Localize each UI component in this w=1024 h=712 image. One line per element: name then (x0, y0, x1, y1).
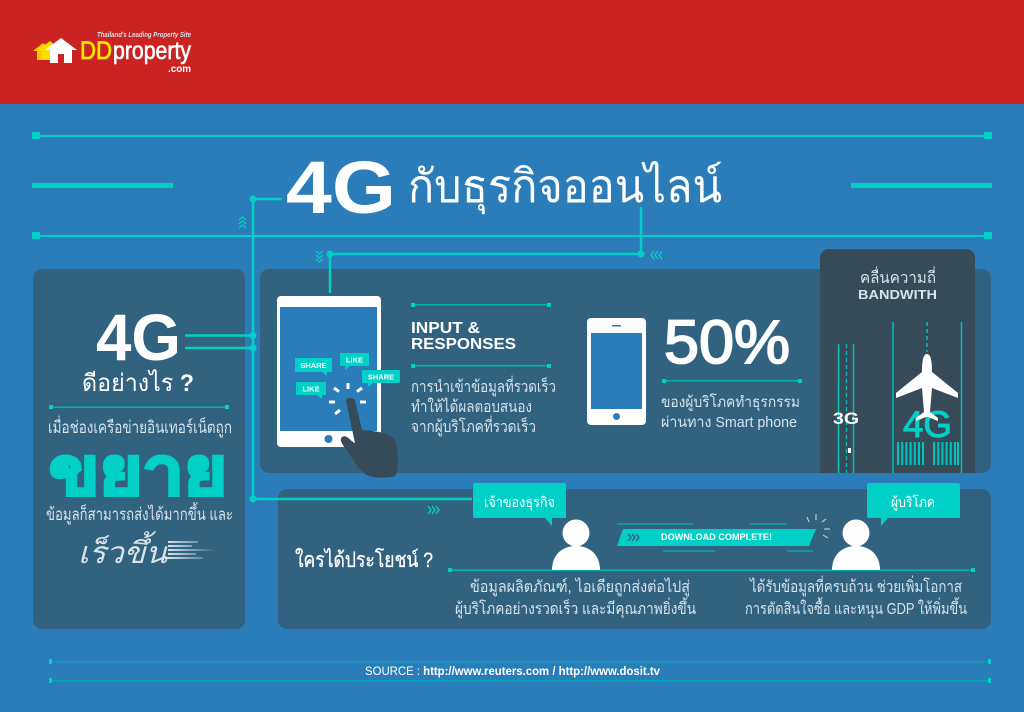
panel: input and smartphone (260, 269, 991, 473)
text: consumer benefit: การตัดสินใจซื้อ และหนุน GDP ให้พิ่มขึ้น (745, 597, 967, 619)
divider: bottom panel (448, 568, 975, 572)
title: กับธุรกิจออนไลน์ (408, 160, 722, 215)
business owner (473, 483, 600, 570)
icon: tablet with hand: LIKE (346, 356, 363, 364)
logo (33, 30, 191, 75)
panel: 4G benefits: ข้อมูลก็สามารถส่งได้มากขึ้น และ (46, 502, 233, 525)
panel: 4G benefits (33, 269, 245, 629)
text: input and responses: INPUT & (411, 320, 480, 337)
panel: who benefits (278, 489, 991, 629)
text: owner benefit: ผู้บริโภคอย่างรวดเร็ว และมีคุณภาพยิ่งขึ้น (455, 597, 696, 619)
stat: 50 percent: ของผู้บริโภคทำธุรกรรม (661, 393, 800, 412)
consumer: ผู้บริโภค (891, 494, 935, 511)
icon: tablet with hand: SHARE (300, 361, 327, 370)
panel: 4G benefits: ขยาย (49, 434, 227, 508)
panel: 4G benefits: เมื่อช่องเครือข่ายอินเทอร์เน็ตถูก (48, 415, 232, 438)
panel: bandwidth: 4G (903, 404, 952, 445)
title: 4G (286, 146, 396, 229)
download banner (617, 514, 830, 551)
text: consumer benefit (745, 575, 967, 619)
source (49, 659, 991, 683)
logo: DD (80, 37, 112, 65)
title rules (32, 132, 992, 239)
logo: .com (168, 64, 191, 75)
source: SOURCE : http://www.reuters.com / http://www.dosit.tv (365, 666, 661, 678)
download banner: DOWNLOAD COMPLETE! (661, 532, 772, 542)
icon: tablet with hand: LIKE (302, 384, 320, 394)
text: input and responses: RESPONSES (411, 336, 516, 353)
icon: tablet with hand: SHARE (368, 372, 394, 382)
text: input and responses: การนำเข้าข้อมูลที่รวดเร็ว (411, 375, 556, 397)
panel: bandwidth: คลื่นความถี่ (860, 266, 936, 287)
header band (0, 0, 1024, 104)
icon: smartphone (587, 318, 646, 425)
consumer (832, 483, 960, 570)
panel: bandwidth: 3G (833, 409, 859, 428)
text: input and responses: ทำให้ได้ผลตอบสนอง (411, 397, 532, 416)
connector lines (185, 196, 662, 514)
title (286, 146, 722, 229)
text: input and responses: จากผู้บริโภคที่รวดเร็ว (411, 415, 536, 437)
logo: property (113, 37, 191, 65)
panel: bandwidth: BANDWITH (858, 287, 937, 302)
panel: bandwidth (820, 249, 975, 473)
text: owner benefit (455, 577, 696, 619)
icon: tablet with hand (277, 296, 400, 478)
panel: 4G benefits: ดีอย่างไร ? (82, 369, 194, 397)
text: input and responses (411, 303, 556, 437)
heading: who benefits: ใครได้ประโยชน์ ? (295, 548, 433, 572)
text: owner benefit: ข้อมูลผลิตภัณฑ์, ไอเดียถูกส่งต่อไปสู่ (470, 577, 690, 597)
logo: Thailand's Leading Property Site (97, 30, 191, 39)
panel: 4G benefits: 4G (96, 300, 181, 374)
stat: 50 percent (661, 308, 802, 431)
text: consumer benefit: ได้รับข้อมูลที่ครบถ้วน ช่วยเพิ่มโอกาส (748, 575, 962, 597)
business owner: เจ้าของธุรกิจ (484, 494, 555, 511)
panel: 4G benefits: เร็วขึ้น (78, 531, 169, 570)
stat: 50 percent: ผ่านทาง Smart phone (661, 414, 797, 431)
stat: 50 percent: 50% (664, 308, 790, 376)
